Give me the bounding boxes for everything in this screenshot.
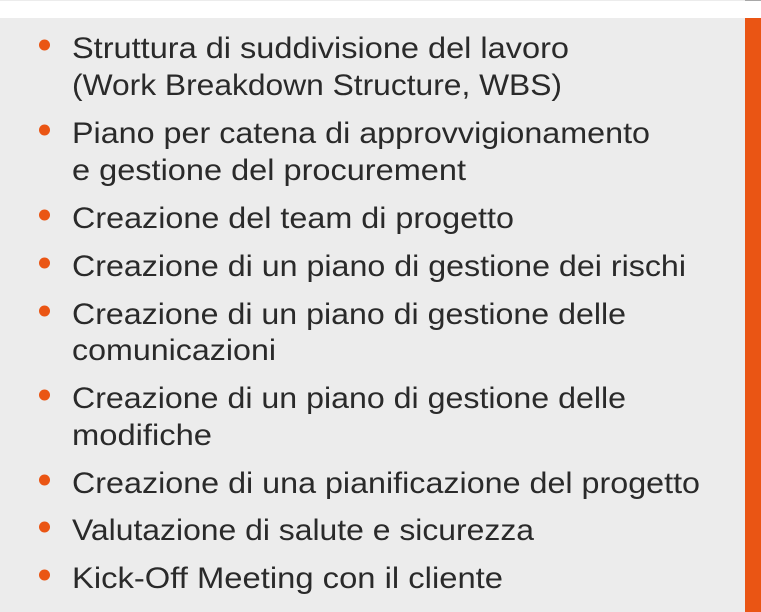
list item: communications plan [39, 298, 626, 367]
list item: project team: Creazione del team di progetto [72, 202, 514, 235]
list item: work breakdown structure: Struttura di suddivisione del lavoro [72, 32, 569, 65]
list item: kick-off meeting: Kick-Off Meeting con il cliente [72, 562, 503, 595]
list item: change management plan: Creazione di un piano di gestione delle [72, 382, 626, 415]
list item: project schedule: Creazione di una pianificazione del progetto [72, 467, 700, 500]
orange side bar [745, 18, 761, 612]
list item: health and safety: Valutazione di salute e sicurezza [72, 514, 534, 547]
list item: supply chain and procurement [39, 117, 650, 187]
list item: communications plan: Creazione di un piano di gestione delle [72, 298, 626, 331]
list item: communications plan: comunicazioni [72, 334, 276, 367]
list item: supply chain and procurement: Piano per catena di approvvigionamento [72, 117, 650, 150]
list item: risk plan: Creazione di un piano di gestione dei rischi [72, 250, 686, 283]
list item: work breakdown structure: (Work Breakdown Structure, WBS) [72, 69, 562, 102]
list item: change management plan [39, 382, 626, 452]
list item: work breakdown structure [39, 32, 569, 102]
list item: change management plan: modifiche [72, 419, 212, 452]
list item: supply chain and procurement: e gestione del procurement [72, 154, 467, 187]
